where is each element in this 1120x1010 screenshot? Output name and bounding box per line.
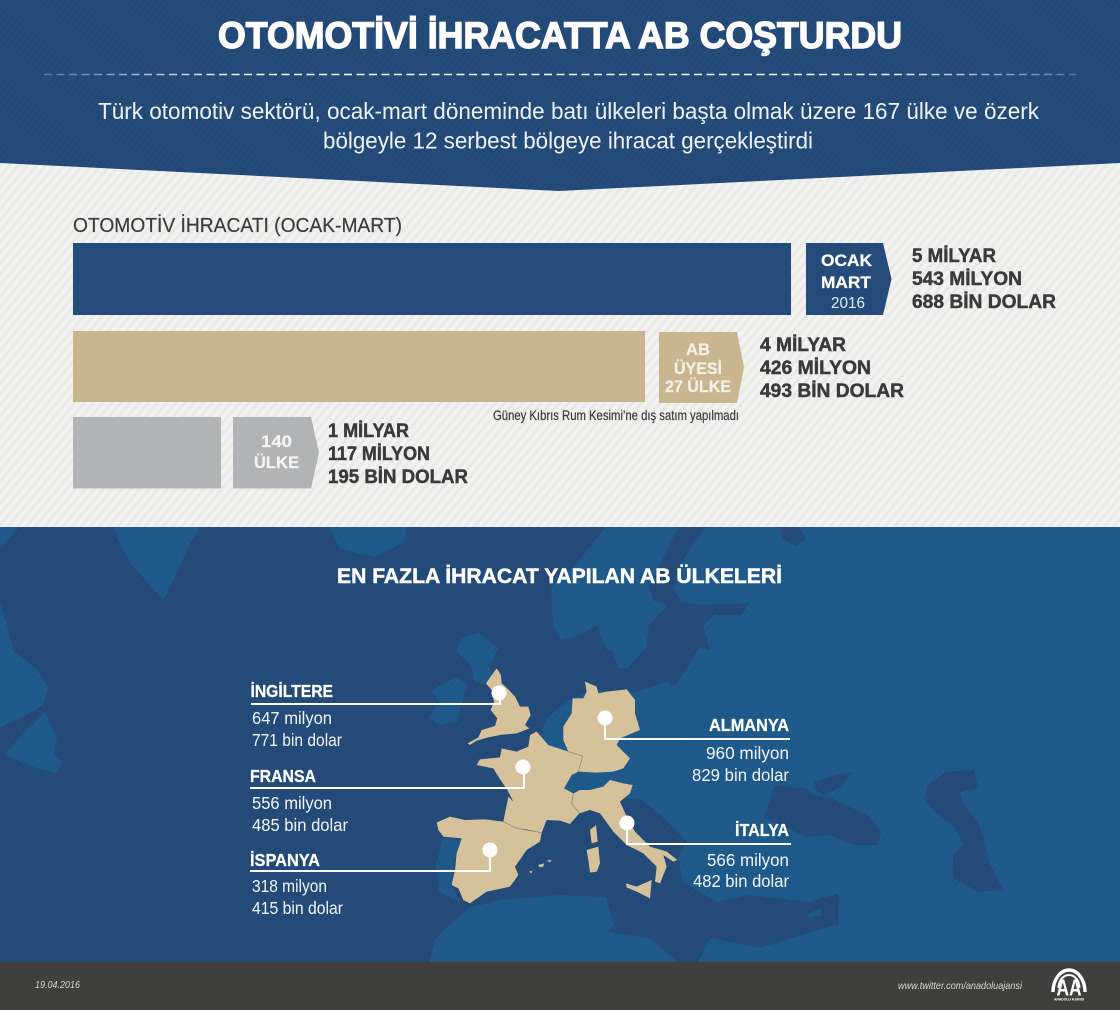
country: Germany bbox=[563, 682, 640, 773]
value: EU bbox=[760, 335, 904, 402]
panel: paper background bbox=[0, 160, 1120, 528]
callout: İtalya: İTALYA bbox=[735, 820, 789, 840]
callout: İspanya: 318 milyon bbox=[252, 876, 327, 896]
value: total: 5 MİLYAR bbox=[912, 246, 996, 267]
arrow label: AB üyesi: AB bbox=[686, 340, 710, 359]
bar: total bbox=[73, 243, 1056, 315]
value: total: 688 BİN DOLAR bbox=[912, 292, 1056, 313]
icon: Anadolu Ajansı logo bbox=[1053, 970, 1085, 1002]
callout: İngiltere: 647 milyon bbox=[252, 708, 332, 728]
callout: İspanya bbox=[250, 842, 498, 918]
country: England bbox=[468, 668, 531, 745]
island: Sardinia bbox=[587, 847, 600, 873]
arrow label: 140 ülke bbox=[233, 417, 319, 488]
subtitle bbox=[98, 98, 1039, 154]
callout: İngiltere: İNGİLTERE bbox=[250, 681, 333, 701]
value: others: 1 MİLYAR bbox=[328, 421, 409, 442]
source link: www.twitter.com/anadoluajansi bbox=[898, 980, 1023, 992]
heading: chart title: OTOMOTİV İHRACATI (OCAK-MART) bbox=[73, 214, 402, 237]
value: others bbox=[328, 421, 468, 488]
callout: Almanya bbox=[598, 710, 790, 785]
country: Italy bbox=[572, 780, 677, 883]
value: total bbox=[912, 246, 1056, 313]
country: France bbox=[477, 732, 583, 833]
value: EU: 493 BİN DOLAR bbox=[760, 381, 904, 402]
callout: Almanya: 960 milyon bbox=[706, 743, 789, 763]
arrow label: AB üyesi bbox=[659, 332, 744, 403]
callout: İspanya: 415 bin dolar bbox=[252, 898, 343, 918]
arrow label: Ocak-Mart 2016: MART bbox=[821, 273, 872, 292]
value: total: 543 MİLYON bbox=[912, 269, 1022, 290]
heading: map title: EN FAZLA İHRACAT YAPILAN AB ÜLKELERİ bbox=[337, 563, 782, 588]
bar chart: export bars bbox=[73, 243, 1056, 488]
arrow label: Ocak-Mart 2016 bbox=[806, 243, 892, 315]
callout: Fransa bbox=[250, 760, 530, 835]
title: OTOMOTİVİ İHRACATTA AB COŞTURDU bbox=[218, 14, 902, 56]
callout: İtalya bbox=[620, 816, 791, 891]
panel: header band bbox=[0, 0, 1120, 191]
arrow label: Ocak-Mart 2016: OCAK bbox=[821, 251, 873, 270]
callout: Fransa: 485 bin dolar bbox=[252, 815, 348, 835]
icon: Anadolu Ajansı logo: AA bbox=[1056, 974, 1082, 1000]
callout: İspanya: İSPANYA bbox=[250, 850, 320, 870]
bar: EU members bbox=[73, 331, 904, 423]
callout: İtalya: 482 bin dolar bbox=[693, 871, 789, 891]
arrow label: AB üyesi: ÜYESİ bbox=[674, 359, 722, 378]
island: Balearics bbox=[529, 860, 552, 874]
callout: Fransa: FRANSA bbox=[250, 766, 316, 786]
icon: Anadolu Ajansı logo: ANADOLU AJANSI bbox=[1054, 998, 1084, 1002]
arrow label: AB üyesi: 27 ÜLKE bbox=[665, 377, 731, 396]
value: others: 195 BİN DOLAR bbox=[328, 467, 468, 488]
map: highlighted EU countries bbox=[437, 668, 677, 903]
callout: İngiltere bbox=[250, 681, 506, 750]
bar: other countries bbox=[73, 417, 468, 488]
island: Sicily bbox=[626, 880, 652, 898]
value: EU: 426 MİLYON bbox=[760, 358, 871, 379]
callout: Almanya: ALMANYA bbox=[709, 715, 789, 735]
island: Corsica bbox=[590, 825, 598, 843]
callout: Almanya: 829 bin dolar bbox=[692, 765, 789, 785]
arrow label: 140 ülke: 140 bbox=[261, 432, 292, 451]
country: Spain bbox=[437, 817, 542, 903]
callout: İngiltere: 771 bin dolar bbox=[252, 730, 342, 750]
subtitle: Türk otomotiv sektörü, ocak-mart döneminde batı ülkeleri başta olmak üzere 167 ülke ve özerk bbox=[98, 98, 1039, 124]
subtitle: bölgeyle 12 serbest bölgeye ihracat gerçekleştirdi bbox=[323, 128, 813, 154]
value: others: 117 MİLYON bbox=[328, 444, 430, 465]
date: 19.04.2016 bbox=[35, 980, 80, 991]
footer bar bbox=[0, 962, 1120, 1010]
arrow label: Ocak-Mart 2016: 2016 bbox=[831, 295, 865, 312]
value: EU: 4 MİLYAR bbox=[760, 335, 846, 356]
panel: map section background bbox=[0, 527, 1120, 962]
arrow label: 140 ülke: ÜLKE bbox=[254, 453, 299, 472]
callout: İtalya: 566 milyon bbox=[707, 850, 789, 870]
footnote: Güney Kıbrıs Rum Kesimi’ne dış satım yapılmadı bbox=[493, 408, 739, 423]
callout: Fransa: 556 milyon bbox=[252, 793, 332, 813]
